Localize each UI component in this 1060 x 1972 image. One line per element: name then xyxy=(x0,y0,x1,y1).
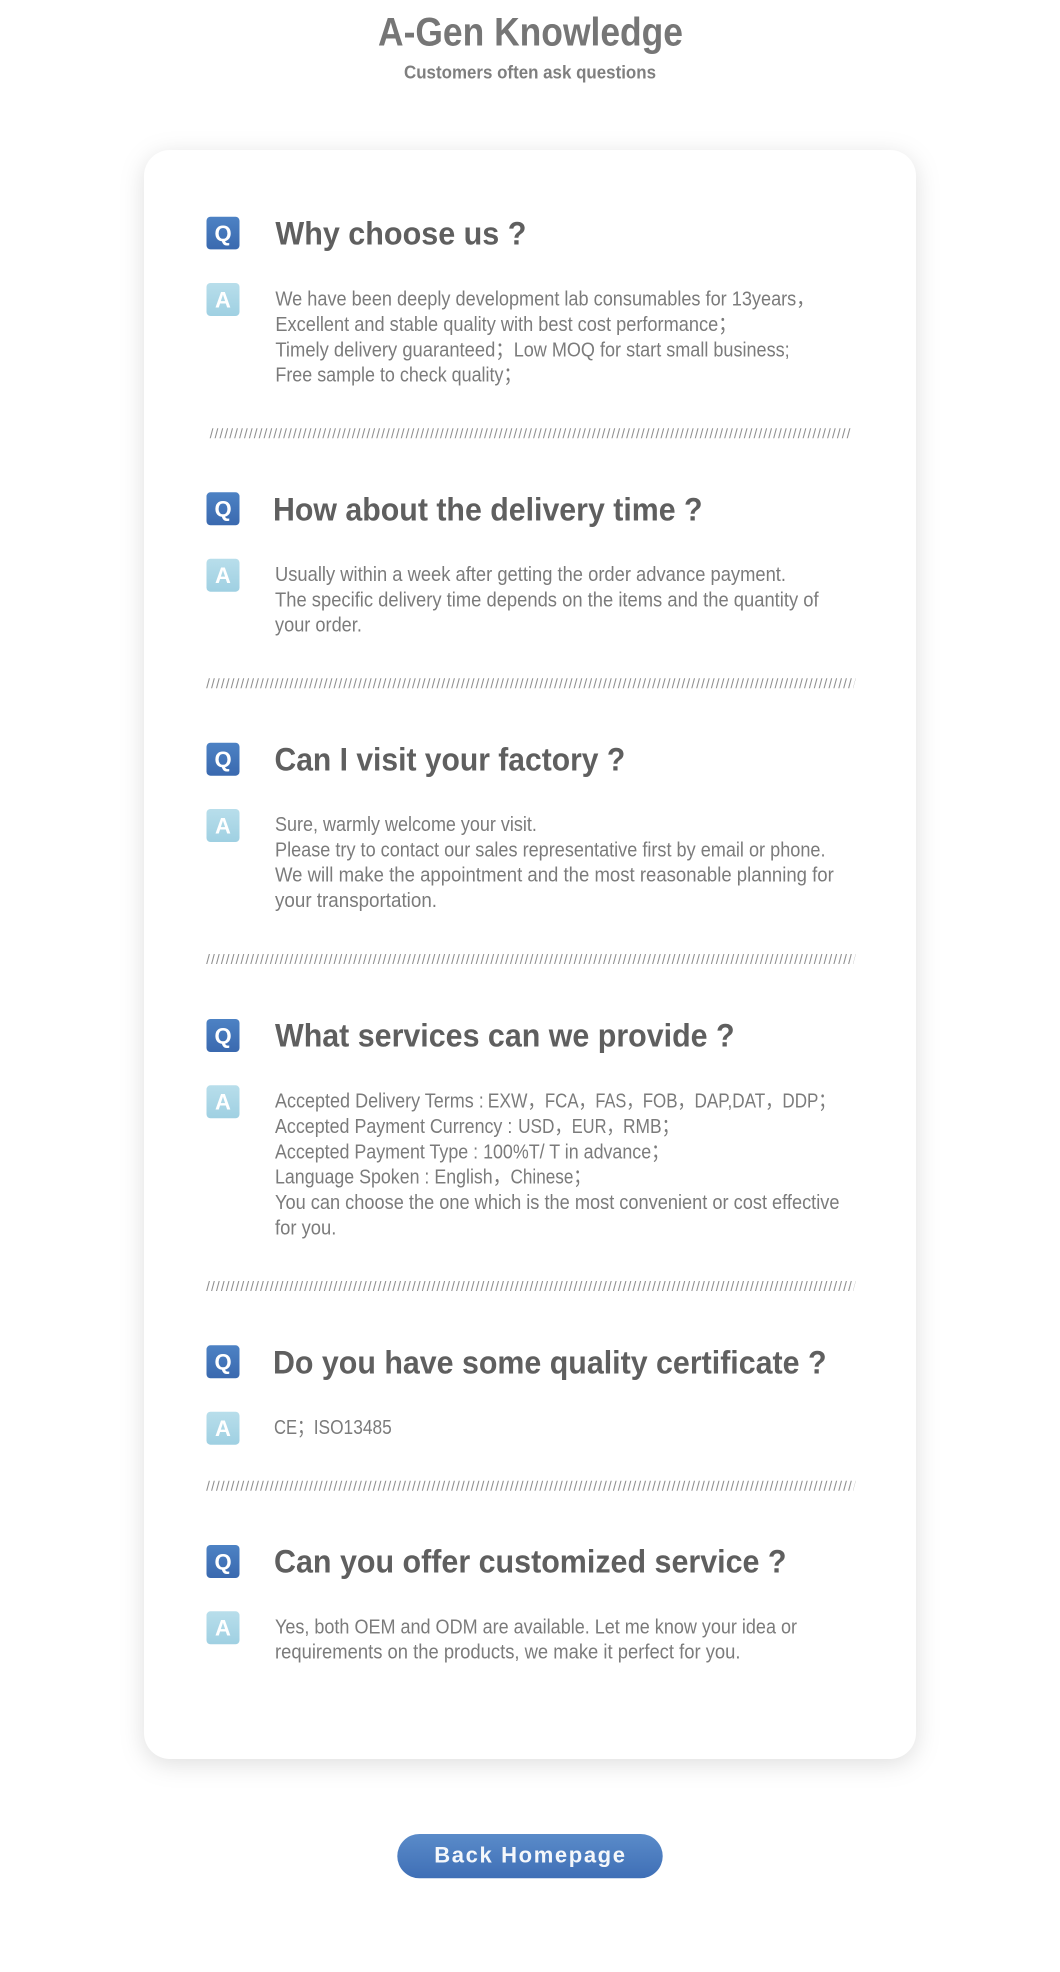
heading: delivery time: How about the delivery time ? xyxy=(273,492,702,528)
icon: Q badge xyxy=(206,1545,240,1578)
answer text: ISO13485 xyxy=(314,1416,392,1439)
answer text: USD， xyxy=(518,1115,572,1138)
answer text: The specific delivery time depends on the items and the quantity of xyxy=(275,588,819,611)
icon: A badge: A xyxy=(215,1090,231,1115)
answer text: RMB； xyxy=(623,1115,679,1138)
icon: Q badge xyxy=(206,743,240,776)
icon: Q badge: Q xyxy=(214,497,232,522)
answer text: EUR， xyxy=(572,1115,623,1138)
icon: A badge xyxy=(206,283,240,316)
answer text: for you. xyxy=(275,1216,336,1239)
heading: why choose us: Why choose us ? xyxy=(275,215,526,251)
icon: Q badge: Q xyxy=(214,1549,232,1574)
icon: A badge: A xyxy=(215,287,231,312)
answer text: Accepted Payment Currency : xyxy=(275,1115,512,1138)
icon: Q badge xyxy=(206,492,240,525)
icon: Q badge: Q xyxy=(214,221,232,246)
icon: Q badge: Q xyxy=(214,747,232,772)
answer text: DDP； xyxy=(782,1090,835,1113)
section: delivery time xyxy=(206,492,819,637)
answer text xyxy=(275,813,834,912)
answer text: DAP,DAT， xyxy=(694,1090,782,1113)
answer text: Please try to contact our sales representative first by email or phone. xyxy=(275,838,826,861)
answer text: We will make the appointment and the most reasonable planning for xyxy=(275,864,834,887)
answer text xyxy=(275,1615,797,1664)
panel: FAQ card xyxy=(144,150,916,1759)
answer text xyxy=(275,288,814,387)
icon: Q badge xyxy=(206,1345,240,1378)
heading: customized service: Can you offer customized service ? xyxy=(274,1544,786,1580)
icon: A badge xyxy=(206,1085,240,1118)
answer text: Language Spoken : English， xyxy=(275,1166,510,1189)
answer text xyxy=(275,563,819,637)
answer text: Yes, both OEM and ODM are available. Let me know your idea or xyxy=(275,1615,797,1638)
icon: A badge: A xyxy=(215,1416,231,1441)
answer text: FAS， xyxy=(595,1090,643,1113)
subtitle: Customers often ask questions xyxy=(404,62,656,82)
icon: A badge xyxy=(206,1611,240,1644)
title: A-Gen Knowledge xyxy=(378,11,683,55)
answer text xyxy=(274,1416,392,1439)
heading: quality certificate: Do you have some quality certificate ? xyxy=(273,1344,826,1380)
answer text: Free sample to check quality； xyxy=(275,364,521,387)
section: services xyxy=(206,1018,840,1239)
icon: A badge: A xyxy=(215,813,231,838)
answer text: your transportation. xyxy=(275,889,437,912)
answer text: Sure, warmly welcome your visit. xyxy=(275,813,537,836)
answer text: EXW， xyxy=(488,1090,545,1113)
heading: services: What services can we provide ? xyxy=(275,1018,735,1054)
answer text xyxy=(275,1090,840,1239)
answer text: Timely delivery guaranteed； xyxy=(275,338,514,361)
answer text: Accepted Payment Type : 100%T/ T in advance； xyxy=(275,1140,669,1163)
button: back homepage: Back Homepage xyxy=(434,1843,625,1868)
heading: factory visit: Can I visit your factory ? xyxy=(274,742,625,778)
icon: Q badge xyxy=(206,1019,240,1052)
answer text: FCA， xyxy=(545,1090,595,1113)
section: quality certificate xyxy=(206,1344,826,1445)
section: why choose us xyxy=(206,215,814,387)
answer text: Chinese； xyxy=(510,1166,590,1189)
icon: A badge xyxy=(206,559,240,592)
icon: A badge: A xyxy=(215,563,231,588)
answer text: FOB， xyxy=(643,1090,694,1113)
answer text: We have been deeply development lab consumables for 13years， xyxy=(275,288,814,311)
icon: A badge xyxy=(206,809,240,842)
button: back homepage xyxy=(397,1834,663,1878)
icon: Q badge: Q xyxy=(214,1023,232,1048)
icon: A badge: A xyxy=(215,1616,231,1641)
section: customized service xyxy=(206,1544,797,1664)
section: factory visit xyxy=(206,742,834,912)
answer text: Usually within a week after getting the order advance payment. xyxy=(275,563,786,586)
answer text: your order. xyxy=(275,614,362,637)
answer text: You can choose the one which is the most convenient or cost effective xyxy=(275,1191,840,1214)
answer text: requirements on the products, we make it perfect for you. xyxy=(275,1641,740,1664)
answer text: Accepted Delivery Terms : xyxy=(275,1090,484,1113)
icon: Q badge: Q xyxy=(214,1350,232,1375)
answer text: Excellent and stable quality with best cost performance； xyxy=(275,313,736,336)
icon: A badge xyxy=(206,1412,240,1445)
icon: Q badge xyxy=(206,217,240,249)
answer text: CE； xyxy=(274,1416,314,1439)
answer text: Low MOQ for start small business; xyxy=(514,338,790,361)
